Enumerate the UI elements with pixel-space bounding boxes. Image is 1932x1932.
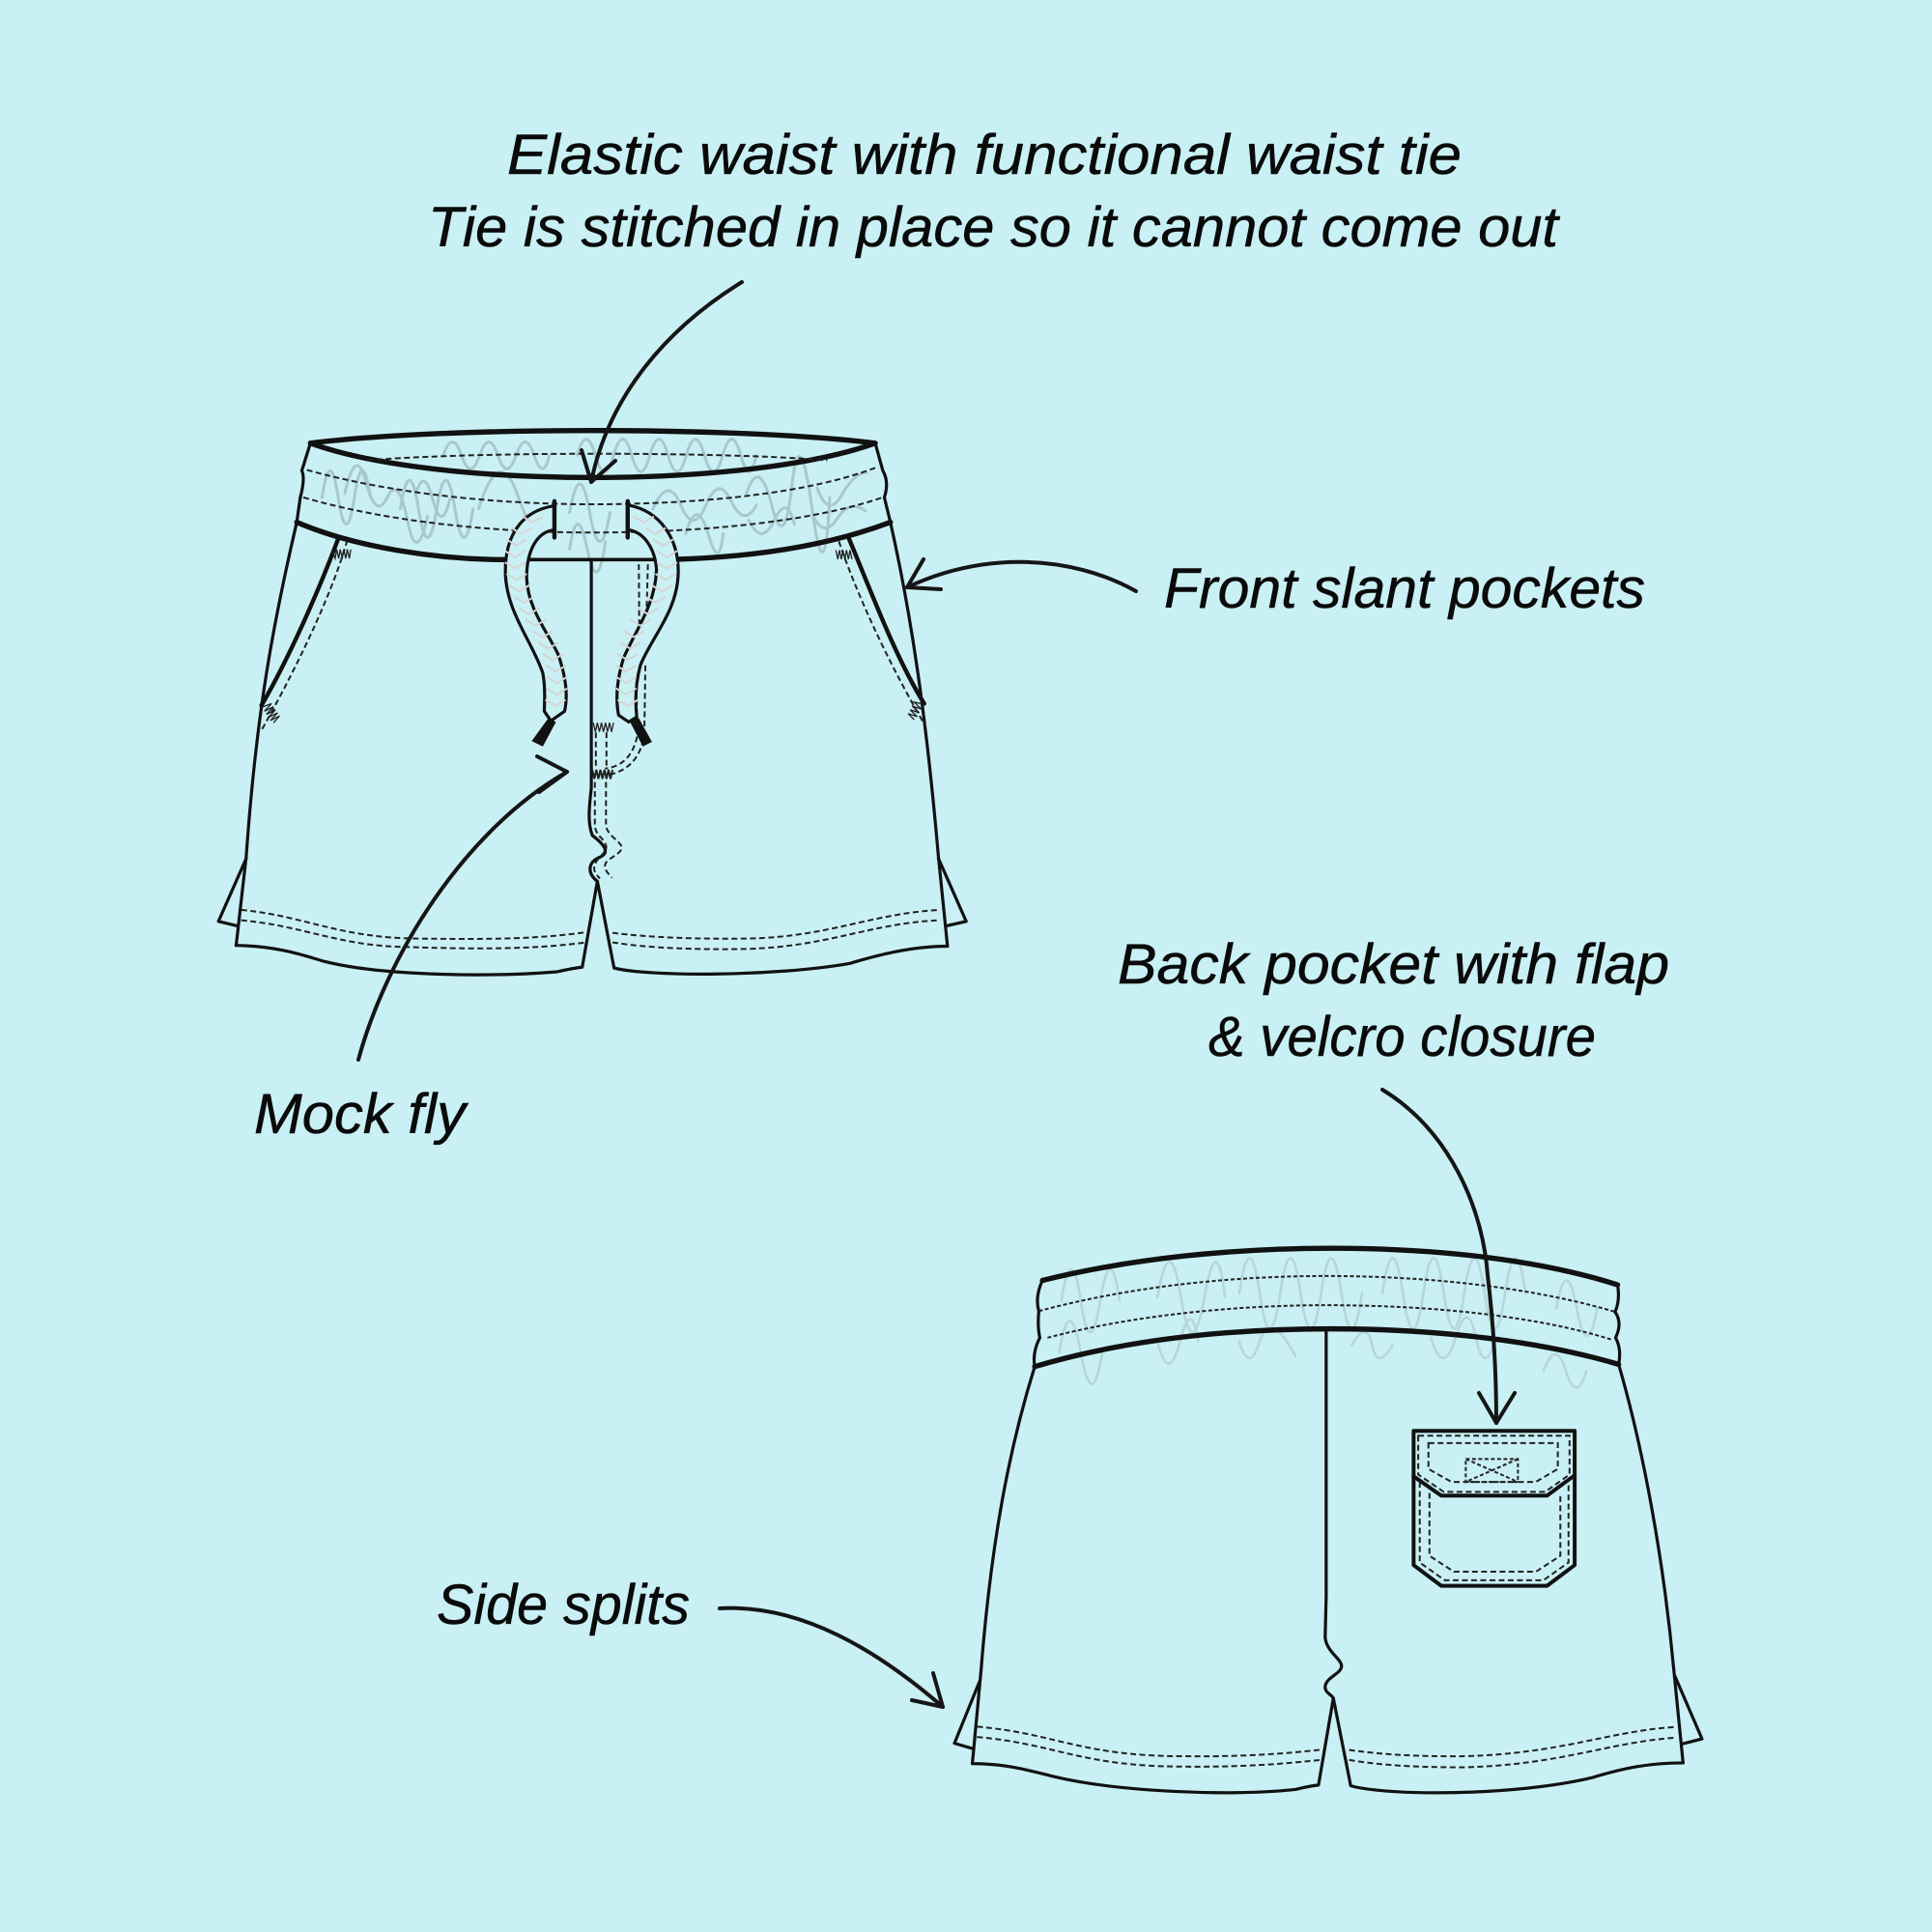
label: front slant pockets: Front slant pockets — [1164, 557, 1645, 620]
title: waist label: Elastic waist with functional waist tie — [507, 124, 1462, 186]
waistband — [297, 431, 891, 559]
right drawcord — [616, 501, 678, 747]
label: back pocket: & velcro closure — [1208, 1006, 1596, 1068]
label: back pocket — [1118, 933, 1669, 1068]
front view shorts — [218, 431, 966, 975]
arrow: mock fly — [358, 756, 567, 1060]
back waistband — [1034, 1248, 1620, 1367]
velcro patch — [1465, 1459, 1518, 1482]
left pocket — [262, 537, 351, 730]
shorts body outline — [218, 523, 966, 975]
arrow: back pocket — [1382, 1090, 1515, 1423]
front hem stitching — [242, 910, 940, 950]
left drawcord — [505, 501, 567, 747]
label: mock fly: Mock fly — [254, 1083, 469, 1146]
back body outline — [954, 1331, 1702, 1793]
back pocket with flap — [1413, 1431, 1575, 1586]
back waistband gathering squiggles — [1060, 1259, 1597, 1387]
label: back pocket: Back pocket with flap — [1118, 933, 1669, 996]
fly stitching — [592, 564, 648, 879]
front waistband gathering squiggles — [322, 440, 867, 572]
label: side splits: Side splits — [437, 1574, 690, 1636]
arrow: side splits — [720, 1608, 943, 1707]
arrow: front pockets — [907, 559, 1136, 591]
title: waist label: Tie is stitched in place so it cannot come out — [428, 196, 1561, 259]
arrow: waist — [582, 282, 742, 482]
back hem stitching — [977, 1726, 1675, 1768]
right pocket — [836, 537, 925, 726]
back view shorts — [954, 1248, 1702, 1793]
title: waist label — [428, 124, 1561, 259]
